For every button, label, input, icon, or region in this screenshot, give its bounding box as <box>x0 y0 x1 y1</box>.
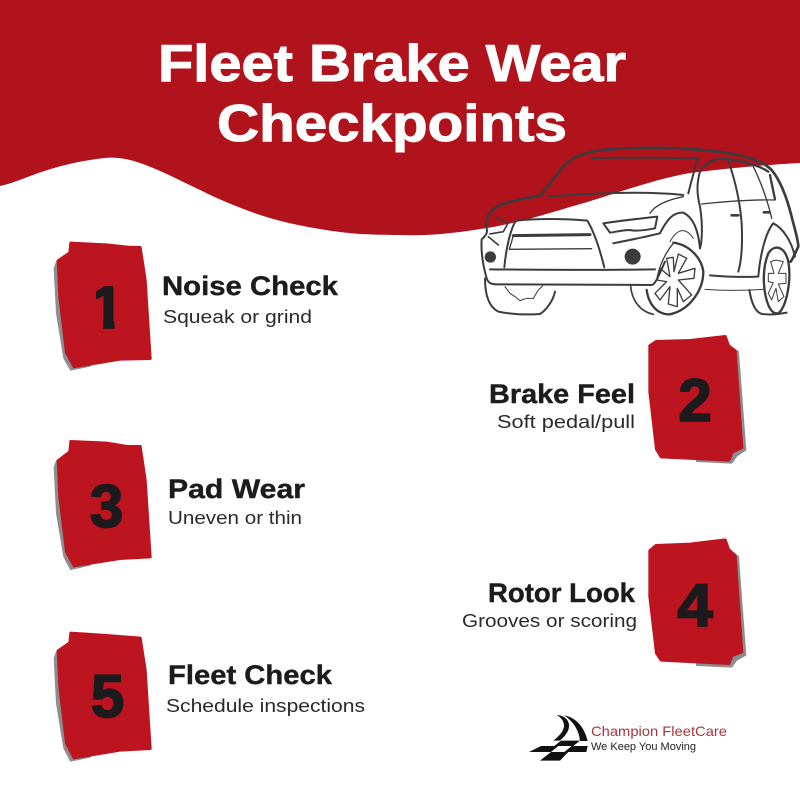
step 5: fleet check <box>54 633 365 761</box>
step 1: noise check <box>54 243 338 370</box>
label 2 <box>489 379 635 432</box>
number 5: 5 <box>91 663 124 730</box>
badge 5 <box>54 633 150 761</box>
label 3: Pad Wear <box>168 474 305 504</box>
label 4 <box>462 578 637 631</box>
label 1 <box>162 271 338 327</box>
title: Checkpoints <box>217 95 567 153</box>
logo: Champion FleetCare <box>529 715 727 761</box>
icon: checkered flag and road <box>529 715 588 761</box>
badge 1 <box>54 243 150 370</box>
label 3: Uneven or thin <box>168 508 302 528</box>
step 4: rotor look <box>462 540 746 667</box>
label 4: Rotor Look <box>488 578 635 608</box>
label 1: Squeak or grind <box>163 307 312 327</box>
label 1: Noise Check <box>162 271 338 301</box>
number 2: 2 <box>678 367 712 434</box>
label 4: Grooves or scoring <box>462 611 637 631</box>
car illustration <box>481 148 798 314</box>
step 2: brake feel <box>489 336 746 463</box>
red wave header <box>0 0 800 235</box>
step 3: pad wear <box>54 441 305 569</box>
number 3: 3 <box>90 473 123 540</box>
title: Fleet Brake Wear <box>158 35 626 93</box>
label 5: Schedule inspections <box>166 696 365 716</box>
logo tagline: We Keep You Moving <box>591 741 696 753</box>
badge 3 <box>54 441 150 569</box>
number 1: 1 <box>91 275 123 341</box>
number 4: 4 <box>677 572 714 639</box>
label 2: Brake Feel <box>489 379 635 409</box>
logo name: Champion FleetCare <box>591 723 727 739</box>
label 5 <box>166 660 365 716</box>
title <box>158 35 626 153</box>
label 3 <box>168 474 305 528</box>
label 2: Soft pedal/pull <box>497 412 635 432</box>
badge 2 <box>650 336 746 463</box>
badge 4 <box>650 540 746 667</box>
label 5: Fleet Check <box>168 660 332 690</box>
